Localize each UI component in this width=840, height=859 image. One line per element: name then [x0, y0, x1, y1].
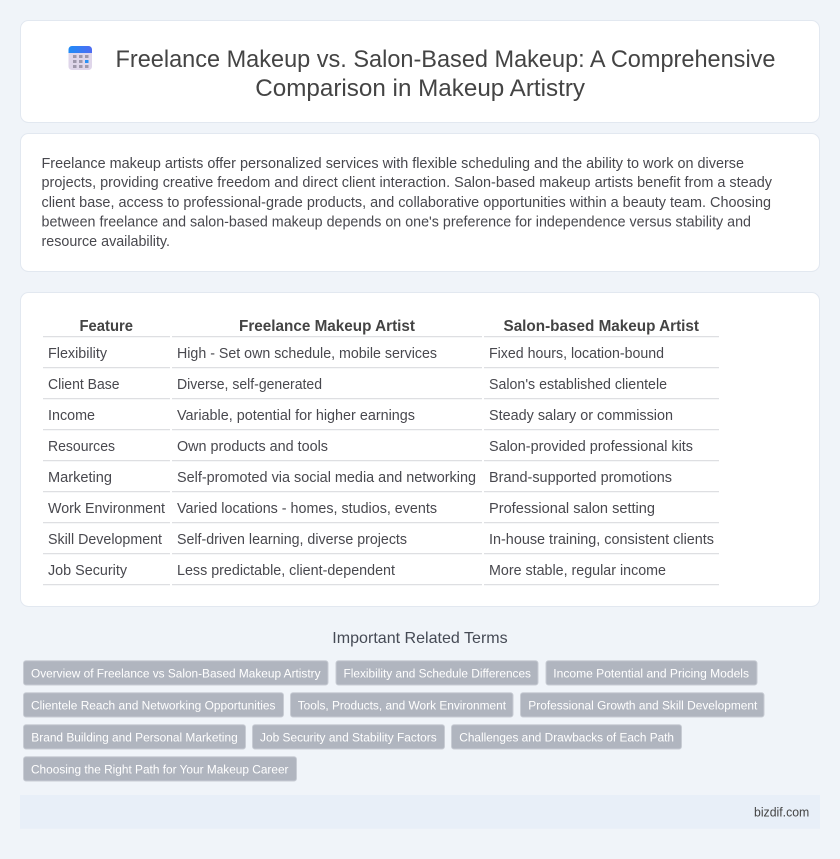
footer bar: [20, 795, 820, 829]
tag: clientele: Clientele Reach and Networking Opportunities: [31, 698, 276, 712]
summary text: resource availability.: [42, 234, 170, 250]
tag: income: [546, 661, 757, 685]
summary text: [42, 156, 773, 250]
row: flexibility: Flexibility: [48, 346, 108, 362]
row: income: Income: [48, 408, 95, 424]
tag: tools: [290, 693, 513, 717]
table header: Feature: [80, 318, 133, 335]
tag: income: Income Potential and Pricing Models: [553, 666, 749, 680]
row: flexibility: [48, 346, 664, 362]
tag: tools: Tools, Products, and Work Environment: [298, 698, 507, 712]
tag: job security: [252, 725, 444, 749]
tag: growth: Professional Growth and Skill Development: [528, 698, 758, 712]
table header: Freelance Makeup Artist: [239, 318, 416, 335]
tag: challenges: [452, 725, 682, 749]
row: income: Steady salary or commission: [489, 408, 673, 424]
row: job security: More stable, regular income: [489, 563, 666, 579]
related terms heading: Important Related Terms: [332, 630, 508, 647]
table header: Salon-based Makeup Artist: [504, 318, 700, 335]
tag: flexibility: Flexibility and Schedule Differences: [344, 666, 531, 680]
row: resources: Salon-provided professional kits: [489, 439, 693, 455]
comparison table panel: [20, 292, 820, 606]
summary panel: [20, 134, 820, 272]
tag: growth: [520, 693, 764, 717]
row: client base: Client Base: [48, 377, 120, 393]
title panel: [20, 20, 820, 122]
title text: [116, 46, 776, 102]
row: skill development: In-house training, consistent clients: [489, 532, 714, 548]
row: work environment: Professional salon setting: [489, 501, 655, 517]
title text: Freelance Makeup vs. Salon-Based Makeup: A Comprehensive: [116, 46, 776, 73]
row: marketing: Self-promoted via social media and networking: [177, 470, 476, 486]
row: skill development: Self-driven learning, diverse projects: [177, 532, 407, 548]
title text: Comparison in Makeup Artistry: [255, 75, 585, 102]
row: work environment: Varied locations - homes, studios, events: [177, 501, 437, 517]
footer source: bizdif.com: [754, 804, 809, 820]
tag: flexibility: [336, 661, 538, 685]
row: job security: Less predictable, client-dependent: [177, 563, 395, 579]
row: marketing: Brand-supported promotions: [489, 470, 672, 486]
tag: brand: [24, 725, 246, 749]
row: work environment: Work Environment: [48, 501, 165, 517]
related term tags: [24, 661, 764, 781]
row: marketing: Marketing: [48, 470, 112, 486]
row: flexibility: Fixed hours, location-bound: [489, 346, 664, 362]
table header: [80, 318, 700, 335]
tag: choosing: Choosing the Right Path for Your Makeup Career: [31, 762, 288, 776]
tag: overview: Overview of Freelance vs Salon-Based Makeup Artistry: [31, 666, 321, 680]
summary text: between freelance and salon-based makeup depends on one's preference for independence versus stability and: [42, 214, 751, 230]
summary text: Freelance makeup artists offer personalized services with flexible scheduling and the ability to work on diverse: [42, 156, 744, 172]
row: client base: Diverse, self-generated: [177, 377, 322, 393]
row: marketing: [48, 470, 672, 486]
tag: brand: Brand Building and Personal Marketing: [31, 730, 238, 744]
row: skill development: [48, 532, 714, 548]
row: job security: Job Security: [48, 563, 128, 579]
row: client base: Salon's established clientele: [489, 377, 667, 393]
row: flexibility: High - Set own schedule, mobile services: [177, 346, 437, 362]
row: client base: [48, 377, 667, 393]
icon: calendar: [68, 46, 92, 70]
row: resources: Resources: [48, 439, 115, 455]
row: job security: [48, 563, 666, 579]
tag: clientele: [24, 693, 284, 717]
summary text: projects, providing creative freedom and direct client interaction. Salon-based makeup artists benefit from a steady: [42, 175, 773, 191]
tag: choosing: [24, 757, 296, 781]
tag: overview: [24, 661, 328, 685]
row: income: Variable, potential for higher earnings: [177, 408, 415, 424]
row: resources: [48, 439, 693, 455]
row: income: [48, 408, 673, 424]
tag: job security: Job Security and Stability Factors: [260, 730, 437, 744]
summary text: client base, access to professional-grade products, and collaborative opportunities within a beauty team. Choosing: [42, 195, 771, 211]
tag: challenges: Challenges and Drawbacks of Each Path: [459, 730, 674, 744]
row: work environment: [48, 501, 655, 517]
row: resources: Own products and tools: [177, 439, 328, 455]
row: skill development: Skill Development: [48, 532, 162, 548]
